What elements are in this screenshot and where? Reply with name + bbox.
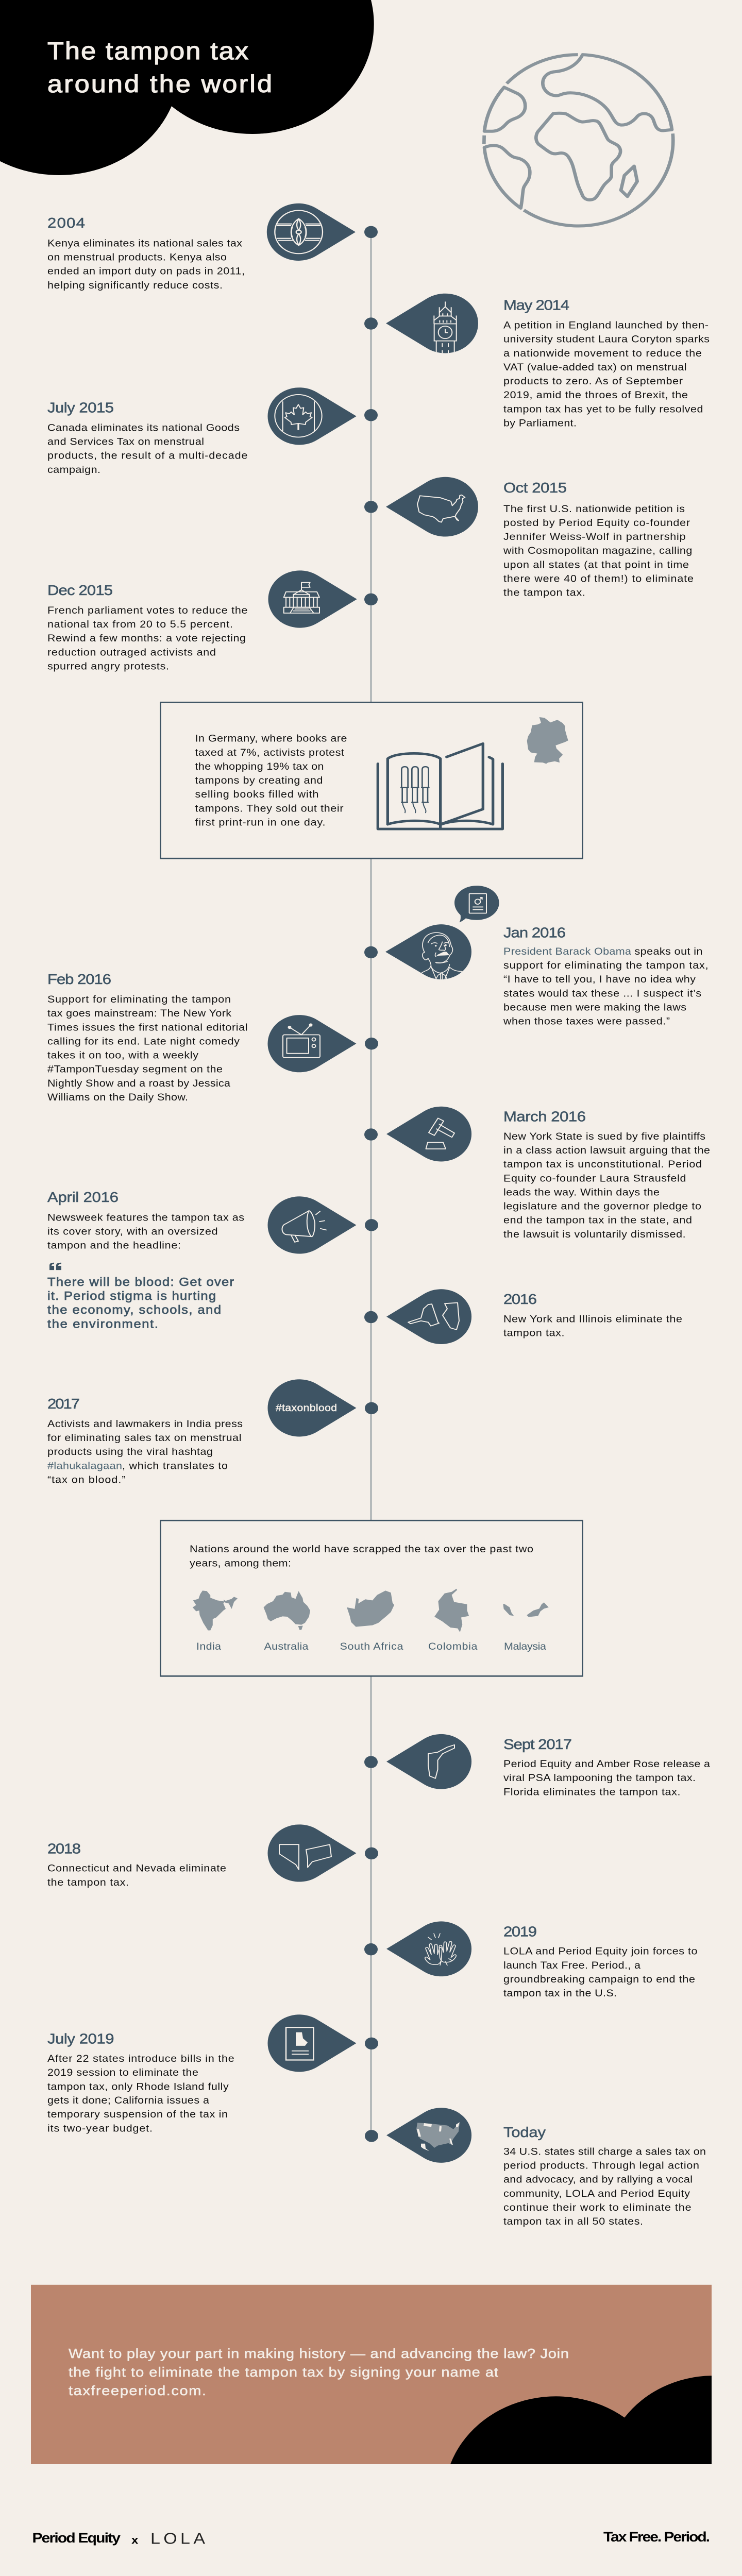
body text: tampon and the headline: <box>47 1240 181 1251</box>
body text: spurred angry protests. <box>47 660 169 672</box>
body text: New York and Illinois eliminate the <box>503 1313 682 1325</box>
callout text: tampons by creating and <box>195 775 323 786</box>
pin: Florida outline <box>386 1734 471 1789</box>
body text: tampon tax has yet to be fully resolved <box>503 403 703 415</box>
body text: Connecticut and Nevada eliminate <box>47 1863 226 1874</box>
heading: 2018 <box>47 1841 81 1857</box>
body text <box>47 2053 234 2134</box>
body text: campaign. <box>47 464 100 476</box>
pin: gavel <box>386 1107 471 1161</box>
body text: takes it on too, with a weekly <box>47 1050 199 1061</box>
footer logos: Period Equity x LOLA <box>32 2530 205 2547</box>
body text: Support for eliminating the tampon <box>47 994 231 1005</box>
footer tagline: Tax Free. Period. <box>603 2529 710 2545</box>
country: India: India <box>196 1641 222 1652</box>
title <box>47 37 272 97</box>
pull quote: the environment. <box>47 1317 158 1331</box>
panel: call to action <box>31 2285 712 2464</box>
body text <box>503 503 694 598</box>
body text: tampon tax in all 50 states. <box>503 2216 643 2227</box>
heading: Dec 2015 <box>47 582 113 598</box>
heading: 2004 <box>47 215 85 231</box>
pin: Canada flag <box>267 387 357 445</box>
event: 2018 <box>47 1824 357 1888</box>
icon: Germany map <box>527 717 568 764</box>
decorative black blob <box>450 2376 712 2464</box>
country: Malaysia: Malaysia <box>504 1641 547 1652</box>
country: Malaysia <box>503 1602 549 1652</box>
event: 2017 <box>47 1379 357 1485</box>
body text: #TamponTuesday segment on the <box>47 1064 223 1075</box>
body text: French parliament votes to reduce the <box>47 605 247 616</box>
body text: by Parliament. <box>503 417 577 429</box>
panel text: Nations around the world have scrapped the tax over the past two <box>190 1544 533 1555</box>
body text: for eliminating sales tax on menstrual <box>47 1432 241 1444</box>
panel: nations that scrapped the tax <box>161 1520 582 1676</box>
body text: viral PSA lampooning the tampon tax. <box>503 1772 696 1784</box>
heading: Oct 2015 <box>503 480 567 496</box>
pin: Barack Obama portrait <box>385 924 471 980</box>
callout text <box>195 733 347 828</box>
heading: Sept 2017 <box>503 1736 572 1752</box>
event: Jan 2016 <box>385 886 709 1027</box>
call to action text <box>69 2346 569 2398</box>
icon: globe <box>484 55 673 226</box>
icon: speech bubble with Mars symbol document <box>454 886 499 922</box>
event: July 2019 <box>47 2014 357 2134</box>
body text: LOLA and Period Equity join forces to <box>503 1946 698 1957</box>
country: Australia: Australia <box>264 1641 309 1652</box>
heading: 2017 <box>47 1396 80 1412</box>
heading: 2019 <box>503 1924 537 1940</box>
body text: New York State is sued by five plaintiffs <box>503 1131 705 1142</box>
body text <box>47 238 245 291</box>
timeline line <box>370 232 372 2136</box>
heading: July 2015 <box>47 400 114 416</box>
body text: there were 40 of them!) to eliminate <box>503 573 694 584</box>
body text: tampon tax, only Rhode Island fully <box>47 2081 229 2092</box>
pin: high-five hands <box>386 1921 471 1976</box>
body text <box>47 994 247 1103</box>
body text: posted by Period Equity co-founder <box>503 517 690 529</box>
body text: gets it done; California issues a <box>47 2095 210 2106</box>
pin: Rhode Island document <box>267 2014 357 2072</box>
callout text: In Germany, where books are <box>195 733 347 744</box>
pin: television <box>267 1015 357 1072</box>
callout text: the whopping 19% tax on <box>195 761 324 772</box>
heading: Feb 2016 <box>47 971 111 988</box>
call to action text: taxfreeperiod.com. <box>69 2383 206 2398</box>
body text: the tampon tax. <box>47 1877 129 1888</box>
panel text <box>190 1544 533 1569</box>
country: South Africa: South Africa <box>340 1641 403 1652</box>
body text: its cover story, with an oversized <box>47 1226 218 1237</box>
pin: United States outline <box>386 477 478 537</box>
body text <box>503 1758 711 1798</box>
panel: Germany callout <box>161 702 582 858</box>
heading: April 2016 <box>47 1189 119 1206</box>
body text <box>503 1131 710 1240</box>
body text: and Services Tax on menstrual <box>47 436 204 447</box>
body text: Kenya eliminates its national sales tax <box>47 238 243 249</box>
body text: Nightly Show and a roast by Jessica <box>47 1078 231 1089</box>
pin: New York and Illinois outlines <box>386 1289 471 1344</box>
title: The tampon tax <box>47 37 248 64</box>
heading: Jan 2016 <box>503 925 566 941</box>
event: Oct 2015 <box>386 477 694 598</box>
body text: end the tampon tax in the state, and <box>503 1215 692 1226</box>
body text: #lahukalagaan <box>47 1460 122 1471</box>
body text: Williams on the Daily Show. <box>47 1092 188 1103</box>
body text <box>503 946 709 1027</box>
body text: 2019, amid the throes of Brexit, the <box>503 389 688 401</box>
pin: megaphone <box>267 1196 357 1254</box>
body text: ended an import duty on pads in 2011, <box>47 266 245 277</box>
body text: The first U.S. nationwide petition is <box>503 503 685 515</box>
body text: upon all states (at that point in time <box>503 559 689 570</box>
body text: tampon tax is unconstitutional. Period <box>503 1159 702 1170</box>
body text <box>47 1418 243 1485</box>
heading: May 2014 <box>503 297 569 313</box>
pin: Big Ben <box>386 294 478 354</box>
pull quote: it. Period stigma is hurting <box>47 1290 216 1303</box>
body text: A petition in England launched by then- <box>503 319 709 331</box>
body text: tampon tax. <box>503 1328 565 1338</box>
body text: community, LOLA and Period Equity <box>503 2188 690 2199</box>
body text <box>503 2146 706 2227</box>
body text: temporary suspension of the tax in <box>47 2109 228 2120</box>
heading: Today <box>503 2124 546 2141</box>
body text: VAT (value-added tax) on menstrual <box>503 362 686 373</box>
event: 2019 <box>386 1921 698 1999</box>
panel text: years, among them: <box>190 1557 291 1569</box>
event: July 2015 <box>47 387 357 476</box>
event: March 2016 <box>386 1107 710 1240</box>
icon: quotation mark <box>49 1263 61 1270</box>
heading: March 2016 <box>503 1109 586 1125</box>
title: around the world <box>47 70 272 97</box>
header blob <box>0 0 374 175</box>
body text: Jennifer Weiss-Wolf in partnership <box>503 531 686 543</box>
body text: when those taxes were passed.” <box>503 1016 670 1027</box>
body text: President Barack Obama <box>503 946 632 957</box>
country: Colombia: Colombia <box>428 1641 478 1652</box>
body text: products, the result of a multi-decade <box>47 450 247 462</box>
body text: speaks out in <box>634 946 702 957</box>
callout text: selling books filled with <box>195 789 318 800</box>
event: 2004 <box>47 204 356 291</box>
body text: tax goes mainstream: The New York <box>47 1008 232 1019</box>
body text: “tax on blood.” <box>47 1474 126 1485</box>
body text: because men were making the laws <box>503 1002 686 1013</box>
body text: 34 U.S. states still charge a sales tax on <box>503 2146 706 2157</box>
body text: After 22 states introduce bills in the <box>47 2053 234 2064</box>
body text: the lawsuit is voluntarily dismissed. <box>503 1229 686 1240</box>
country: India <box>193 1590 238 1652</box>
body text: period products. Through legal action <box>503 2160 699 2171</box>
body text <box>47 422 247 476</box>
pin: US map of taxed states <box>386 2108 471 2163</box>
body text: continue their work to eliminate the <box>503 2202 692 2213</box>
body text: groundbreaking campaign to end the <box>503 1974 695 1985</box>
callout text: taxed at 7%, activists protest <box>195 747 344 758</box>
body text: calling for its end. Late night comedy <box>47 1036 240 1047</box>
event: May 2014 <box>386 294 710 429</box>
callout text: first print-run in one day. <box>195 817 326 828</box>
callout text: tampons. They sold out their <box>195 803 344 814</box>
body text: Newsweek features the tampon tax as <box>47 1212 244 1223</box>
country: South Africa <box>340 1590 403 1652</box>
body text <box>503 319 710 429</box>
body text: states would tax these ... I suspect it’s <box>503 988 701 999</box>
body text: Period Equity and Amber Rose release a <box>503 1758 711 1770</box>
body text: on menstrual products. Kenya also <box>47 251 227 263</box>
body text: with Cosmopolitan magazine, calling <box>503 545 692 556</box>
footer logos: Period Equity x LOLA: x <box>131 2534 139 2546</box>
body text: products to zero. As of September <box>503 376 683 387</box>
event: Today <box>386 2108 706 2227</box>
body text: launch Tax Free. Period., a <box>503 1960 641 1971</box>
call to action text: the fight to eliminate the tampon tax by signing your name at <box>69 2364 498 2380</box>
body text: helping significantly reduce costs. <box>47 280 223 291</box>
body text <box>503 1946 698 1999</box>
country: Colombia <box>428 1589 478 1652</box>
body text: the tampon tax. <box>503 587 585 598</box>
pull quote <box>47 1276 234 1331</box>
body text: its two-year budget. <box>47 2123 153 2134</box>
body text: , which translates to <box>122 1460 228 1471</box>
heading: 2016 <box>503 1292 537 1308</box>
body text: Times issues the first national editorial <box>47 1022 247 1033</box>
pin: Nevada and Connecticut outlines <box>267 1824 357 1882</box>
pin: French parliament building <box>268 570 357 628</box>
body text: Florida eliminates the tampon tax. <box>503 1786 680 1798</box>
body text: university student Laura Coryton sparks <box>503 334 710 345</box>
timeline dots <box>364 226 378 2142</box>
pin: Kenya shield <box>267 204 356 261</box>
pin: hashtag <box>267 1379 357 1436</box>
pull quote: There will be blood: Get over <box>47 1276 234 1289</box>
body text <box>47 1212 244 1251</box>
body text: 2019 session to eliminate the <box>47 2067 198 2078</box>
body text: national tax from 20 to 5.5 percent. <box>47 619 233 630</box>
body text <box>47 1863 226 1888</box>
body text: Equity co-founder Laura Strausfeld <box>503 1173 686 1184</box>
body text: leads the way. Within days the <box>503 1187 660 1198</box>
body text: Canada eliminates its national Goods <box>47 422 240 433</box>
body text: “I have to tell you, I have no idea why <box>503 974 696 985</box>
body text: legislature and the governor pledge to <box>503 1201 701 1212</box>
body text: and advocacy, and by rallying a vocal <box>503 2174 693 2185</box>
body text: in a class action lawsuit arguing that the <box>503 1145 710 1156</box>
country: Australia <box>264 1591 310 1652</box>
body text: Rewind a few months: a vote rejecting <box>47 633 246 644</box>
pull quote: the economy, schools, and <box>47 1303 221 1317</box>
body text: products using the viral hashtag <box>47 1446 213 1458</box>
body text: a nationwide movement to reduce the <box>503 348 702 359</box>
icon: open book with tampons <box>378 743 502 829</box>
body text: reduction outraged activists and <box>47 647 216 658</box>
body text: tampon tax in the U.S. <box>503 1988 617 1999</box>
footer logos: Period Equity x LOLA: LOLA <box>150 2530 205 2547</box>
event: 2016 <box>386 1289 682 1344</box>
event: Sept 2017 <box>386 1734 711 1798</box>
footer logos: Period Equity x LOLA: Period Equity <box>32 2530 121 2546</box>
body text <box>47 605 247 672</box>
event: April 2016 <box>47 1189 357 1331</box>
event: Dec 2015 <box>47 570 357 672</box>
body text: support for eliminating the tampon tax, <box>503 960 709 971</box>
pin: hashtag: #taxonblood <box>276 1403 337 1414</box>
body text: Activists and lawmakers in India press <box>47 1418 243 1430</box>
call to action text: Want to play your part in making history — and advancing the law? Join <box>69 2346 569 2361</box>
heading: July 2019 <box>47 2031 114 2047</box>
event: Feb 2016 <box>47 971 357 1103</box>
body text <box>503 1313 682 1338</box>
